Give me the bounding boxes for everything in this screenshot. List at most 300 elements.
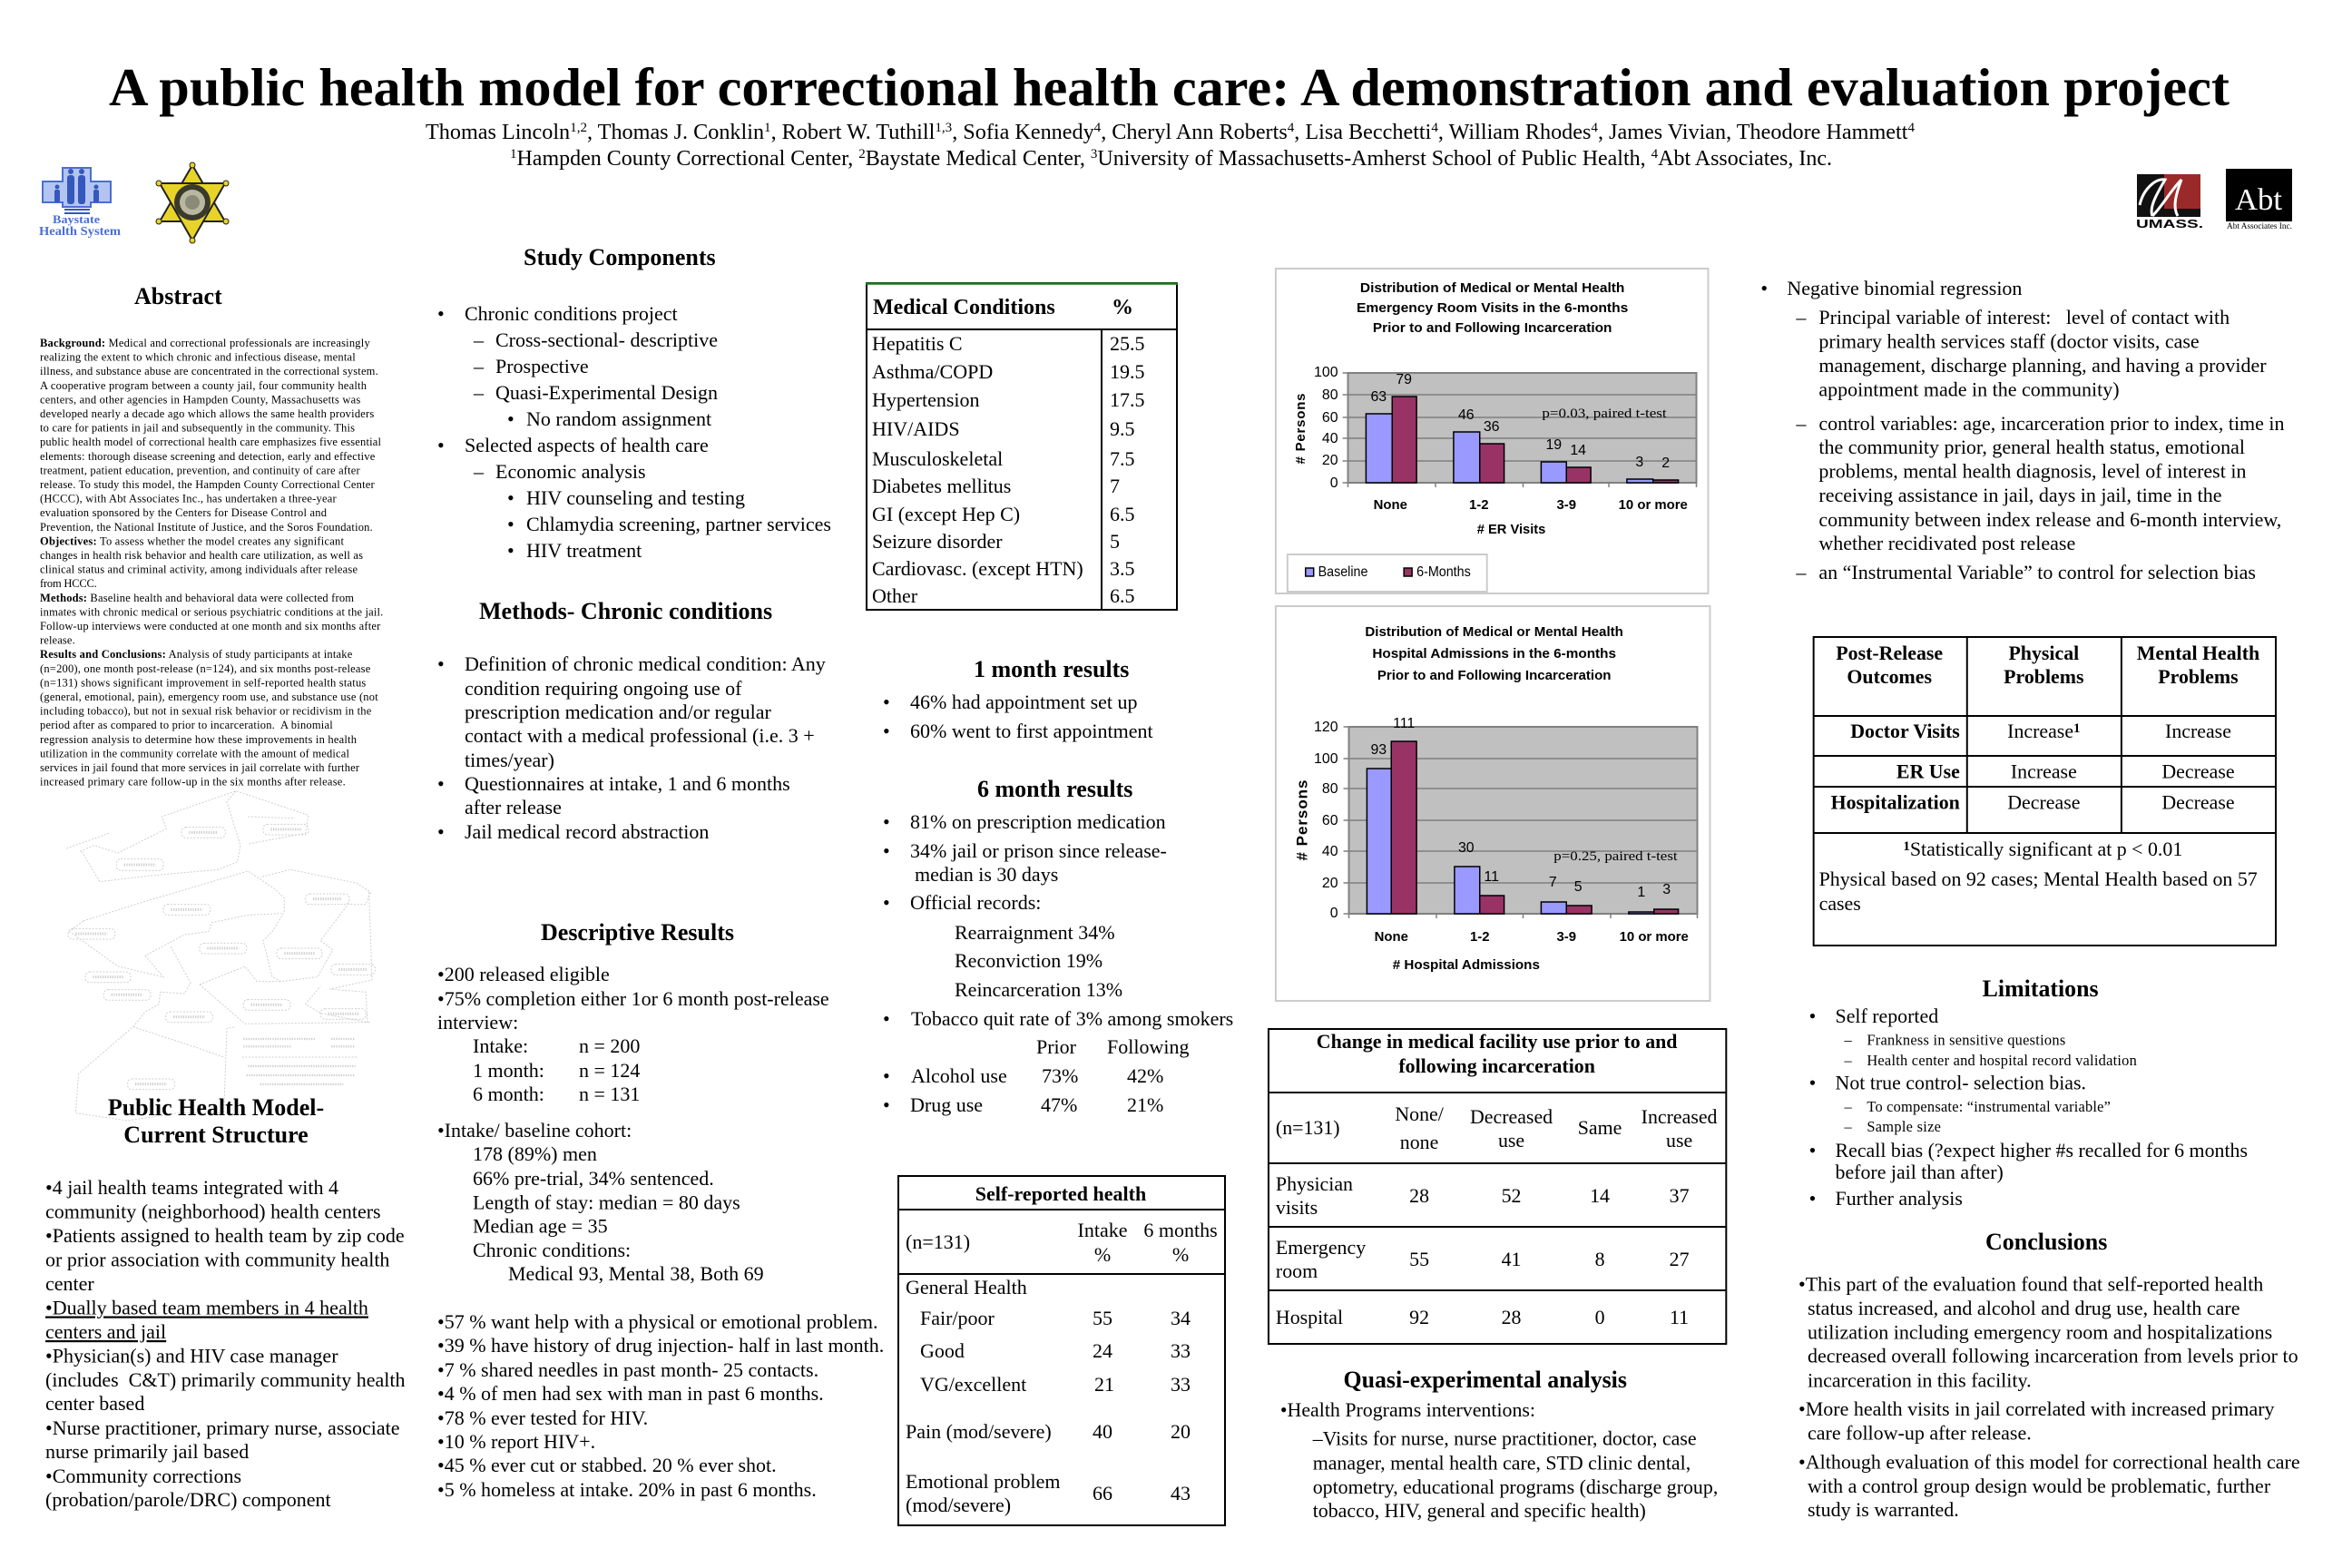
axis and value labels: 40: [1322, 431, 1338, 446]
text block: health programs interventions: –Visits for nurse, nurse practitioner, doctor, case: [1312, 1426, 1697, 1450]
axis and value labels: 20: [1322, 453, 1338, 468]
logo: Abt Associates: Abt Associates Inc.: [2227, 221, 2292, 230]
table: self-reported health: [898, 1176, 1225, 1525]
list: study components: [437, 302, 831, 562]
chart: hospital admissions: [1276, 606, 1710, 1001]
text block: negative binomial regression: –: [1795, 561, 1807, 583]
table: medical conditions: Seizure disorder: [872, 530, 1003, 553]
panel: abstract: [40, 283, 383, 789]
list: limitations: –: [1843, 1118, 1852, 1135]
text block: baseline cohort: 66% pre-trial, 34% sentenced.: [473, 1167, 714, 1190]
text block: risk behaviors: •45 % ever cut or stabbed. 20 % ever shot.: [437, 1454, 777, 1476]
list: limitations: Recall bias (?expect higher #s recalled for 6 months: [1836, 1139, 2248, 1161]
authors: 4: [1094, 121, 1102, 135]
list: methods: •: [437, 772, 445, 795]
axis and value labels: 14: [1570, 443, 1586, 458]
text block: enrollment: Intake:: [473, 1034, 528, 1057]
table: change in medical facility use: none: [1400, 1131, 1438, 1153]
text block: abstract body: evaluation sponsored by the Centers for Disease Control and: [40, 506, 328, 519]
text block: baseline cohort: Median age = 35: [473, 1214, 608, 1238]
table: post-release outcomes: Problems: [2004, 665, 2084, 688]
category and axis titles: None: [1374, 497, 1407, 513]
legend: 6-Months: [1416, 564, 1471, 580]
category and axis titles: 1-2: [1469, 497, 1489, 513]
table: medical conditions: 6.5: [1110, 584, 1134, 607]
affiliations: University of Massachusetts-Amherst School of Public Health,: [1097, 147, 1651, 171]
logo: Baystate Health System: Health System: [39, 225, 121, 239]
list: study components: –: [473, 355, 485, 377]
table: self-reported health: (n=131): [906, 1230, 970, 1253]
table: self-reported health: 6 months: [1143, 1219, 1218, 1241]
table: post-release outcomes: Physical: [2008, 642, 2079, 664]
table: self-reported health: %: [1172, 1243, 1189, 1266]
table: post-release outcomes: Outcomes: [1847, 665, 1932, 688]
table: self-reported health: 40: [1093, 1420, 1112, 1443]
heading: methods: Methods- Chronic conditions: [479, 598, 772, 624]
heading: abstract: Abstract: [134, 283, 222, 309]
text block: negative binomial regression: control variables: age, incarceration prior to index, time in: [1818, 412, 2285, 435]
text block: baseline cohort: Length of stay: median = 80 days: [473, 1191, 740, 1214]
text block: enrollment: interview:: [437, 1011, 518, 1034]
title: A public health model for correctional health care: A demonstration and evaluation project: [109, 57, 2230, 117]
text block: negative binomial regression: community between index release and 6-month interview,: [1818, 508, 2281, 531]
table: change in medical facility use: Hospital: [1276, 1306, 1343, 1328]
category and axis titles: # Hospital Admissions: [1393, 957, 1540, 973]
list: methods: prescription medication and/or regular: [465, 701, 771, 723]
text block: risk behaviors: •78 % ever tested for HIV.: [437, 1406, 648, 1429]
list: limitations: •: [1809, 1004, 1816, 1027]
text block: model description: •Patients assigned to health team by zip code: [45, 1224, 405, 1247]
text block: risk behaviors: •39 % have history of drug injection- half in last month.: [437, 1334, 884, 1357]
axis and value labels: 80: [1322, 781, 1338, 797]
text block: abstract body: including tobacco), but not in sexual risk behavior or recidivism in the: [40, 705, 372, 718]
axis and value labels: 20: [1322, 876, 1338, 891]
authors: , Cheryl Ann Roberts: [1101, 121, 1288, 144]
panel: limitations: [1809, 975, 2248, 1210]
text block: abstract body: (general, emotional, pain), emergency room use, and substance use (not: [40, 691, 378, 703]
logo: sheriff star: [156, 162, 229, 243]
text block: conclusions: decreased overall following incarceration from levels prior to: [1808, 1345, 2298, 1367]
p-value annotation: p=0.25, paired t-test: [1553, 849, 1679, 864]
affiliations: Hampden County Correctional Center,: [516, 147, 858, 171]
table: post-release outcomes: [1814, 637, 2276, 946]
table: post-release outcomes: Increase: [2011, 760, 2077, 783]
axis and value labels: 5: [1574, 879, 1583, 895]
table: self-reported health: VG/excellent: [920, 1373, 1026, 1396]
authors: 4: [1907, 121, 1916, 135]
table: change in medical facility use: Same: [1578, 1116, 1622, 1139]
text block: conclusions: •More health visits in jail correlated with increased primary: [1798, 1397, 2275, 1420]
list: 6 month results: Reincarceration 13%: [955, 978, 1122, 1001]
text block: abstract body: Background: Medical and correctional professionals are increasingly: [40, 337, 370, 349]
table: change in medical facility use: 55: [1409, 1248, 1429, 1270]
chart title: Hospital Admissions in the 6-months: [1372, 646, 1616, 662]
table: self-reported health: Pain (mod/severe): [906, 1420, 1052, 1443]
list: 6 month results: •: [883, 839, 890, 862]
logo: Abt Associates: Abt: [2235, 183, 2283, 217]
table: self-reported health: Good: [920, 1339, 965, 1362]
text block: abstract body: Follow-up interviews were conducted at one month and six months after: [40, 620, 381, 632]
table: change in medical facility use: 28: [1409, 1184, 1429, 1207]
panel: 6 month results: [883, 776, 1233, 1116]
text block: abstract body: elements: thorough disease screening and detection, early and effective: [40, 450, 376, 463]
affiliations: Baystate Medical Center,: [866, 147, 1091, 171]
list: 6 month results: median is 30 days: [915, 863, 1058, 886]
chart title: Prior to and Following Incarceration: [1373, 320, 1612, 336]
text block: model description: center based: [45, 1392, 144, 1415]
panel: 1 month results: [883, 656, 1153, 742]
heading: descriptive results: Descriptive Results: [541, 919, 734, 946]
table: medical conditions: 9.5: [1110, 417, 1134, 440]
text block: abstract body: services in jail found that more services in jail correlate with further: [40, 761, 360, 774]
table: medical conditions: 25.5: [1110, 332, 1145, 355]
list: study components: HIV counseling and testing: [526, 486, 745, 509]
axis and value labels: 79: [1396, 372, 1412, 387]
list: 6 month results: •: [883, 1007, 890, 1030]
text block: health programs interventions: optometry, educational programs (discharge group,: [1313, 1475, 1718, 1498]
text block: abstract body: changes in health risk behavior and health care utilization, as well as: [40, 549, 363, 562]
table: change in medical facility use: use: [1666, 1129, 1692, 1152]
text block: negative binomial regression: Principal variable of interest: level of contact with: [1818, 306, 2230, 328]
list: 6 month results: 42%: [1127, 1064, 1163, 1087]
category and axis titles: [1293, 394, 1688, 537]
category and axis titles: 10 or more: [1620, 929, 1689, 945]
chart title: Distribution of Medical or Mental Health: [1360, 280, 1624, 296]
text block: abstract body: [40, 337, 383, 789]
table: self-reported health: General Health: [906, 1276, 1027, 1298]
list: methods: Questionnaires at intake, 1 and 6 months: [465, 772, 790, 795]
text block: conclusions: study is warranted.: [1808, 1498, 1959, 1521]
legend: [1288, 554, 1487, 592]
list: 1 month results: 60% went to first appointment: [910, 720, 1153, 742]
list: methods: Definition of chronic medical condition: Any: [465, 652, 826, 675]
text block: negative binomial regression: problems, mental health diagnosis, level of interest in: [1818, 460, 2246, 483]
panel: study components: [437, 244, 831, 562]
table: self-reported health: 33: [1171, 1373, 1191, 1396]
table: change in medical facility use: following incarceration: [1398, 1054, 1595, 1077]
text block: conclusions: with a control group design would be problematic, further: [1808, 1475, 2271, 1497]
authors: , William Rhodes: [1438, 121, 1591, 144]
list: study components: Economic analysis: [495, 460, 646, 483]
list: study components: •: [507, 539, 514, 562]
table: change in medical facility use: 28: [1502, 1306, 1522, 1328]
table: self-reported health: 21: [1094, 1373, 1114, 1396]
table: medical conditions: Other: [872, 584, 918, 607]
list: 6 month results: [883, 810, 1233, 1116]
text block: baseline cohort: Medical 93, Mental 38, Both 69: [508, 1262, 764, 1285]
logo: Baystate Health System: [39, 168, 121, 239]
list: 6 month results: Alcohol use: [911, 1064, 1007, 1087]
list: limitations: before jail than after): [1836, 1161, 2004, 1183]
table: self-reported health: 20: [1171, 1420, 1191, 1443]
table: medical conditions: HIV/AIDS: [872, 417, 960, 440]
table: post-release outcomes: Decrease: [2007, 790, 2080, 814]
text block: abstract body: (n=200), one month post-release (n=124), and six months post-release: [40, 662, 371, 675]
category and axis titles: # ER Visits: [1477, 522, 1545, 537]
panel: descriptive results: [437, 919, 884, 1501]
table: medical conditions: Cardiovasc. (except HTN): [872, 557, 1083, 580]
text block: enrollment: [437, 963, 829, 1105]
table: change in medical facility use: Change in medical facility use prior to and: [1317, 1030, 1677, 1053]
axis and value labels: 3: [1662, 882, 1671, 897]
bars: baseline: [1366, 414, 1653, 483]
table: self-reported health: 24: [1093, 1339, 1112, 1362]
text block: health programs interventions: manager, mental health care, STD clinic dental,: [1313, 1451, 1690, 1475]
list: study components: No random assignment: [526, 407, 711, 430]
table: change in medical facility use: 37: [1670, 1184, 1690, 1207]
text block: negative binomial regression: an “Instrumental Variable” to control for selection bias: [1818, 561, 2256, 583]
text block: abstract body: (HCCC), with Abt Associates Inc., has undertaken a three-year: [40, 493, 338, 505]
affiliations: 4: [1651, 147, 1659, 162]
axis and value labels: 100: [1314, 751, 1338, 767]
category and axis titles: [1294, 780, 1689, 973]
list: limitations: Sample size: [1867, 1118, 1941, 1135]
table: self-reported health: (mod/severe): [906, 1494, 1011, 1516]
list: limitations: •: [1809, 1071, 1816, 1094]
list: study components: Chlamydia screening, partner services: [526, 513, 831, 535]
text block: conclusions: utilization including emergency room and hospitalizations: [1808, 1321, 2272, 1343]
axis and value labels: 19: [1545, 437, 1562, 453]
axis and value labels: 36: [1484, 419, 1500, 435]
heading: quasi-experimental analysis: Quasi-experimental analysis: [1344, 1367, 1627, 1393]
text block: abstract body: Results and Conclusions: Analysis of study participants at intake: [40, 648, 353, 661]
text block: risk behaviors: •7 % shared needles in past month- 25 contacts.: [437, 1358, 818, 1381]
text block: baseline cohort: Chronic conditions:: [473, 1239, 631, 1261]
text block: conclusions: incarceration in this facility.: [1808, 1368, 2032, 1392]
text block: abstract body: period after as compared to prior to incarceration. A binomial: [40, 719, 333, 731]
text block: model description: •Physician(s) and HIV case manager: [45, 1345, 338, 1367]
list: study components: Selected aspects of health care: [465, 434, 709, 456]
p-value annotation: p=0.03, paired t-test: [1542, 407, 1668, 421]
list: study components: –: [473, 381, 485, 404]
text block: risk behaviors: •5 % homeless at intake. 20% in past 6 months.: [437, 1478, 817, 1501]
list: limitations: •: [1809, 1187, 1816, 1210]
authors: 1: [764, 121, 771, 135]
table: medical conditions: GI (except Hep C): [872, 503, 1020, 525]
heading: public health model current structure: Public Health Model-: [108, 1094, 324, 1121]
text block: abstract body: release.: [40, 634, 75, 647]
text block: abstract body: realizing the extent to which chronic and infectious disease, mental: [40, 351, 356, 364]
table: post-release outcomes: Decrease: [2161, 790, 2235, 814]
table: medical conditions: Medical Conditions: [873, 296, 1055, 319]
table: self-reported health: 55: [1093, 1307, 1112, 1329]
list: 6 month results: 73%: [1042, 1064, 1078, 1087]
text block: risk behaviors: •10 % report HIV+.: [437, 1430, 595, 1453]
text block: negative binomial regression: the community prior, general health status, emotional: [1818, 436, 2245, 458]
text block: negative binomial regression: primary health services staff (doctor visits, case: [1818, 330, 2200, 352]
axis and value labels: 46: [1458, 407, 1475, 423]
axis and value labels: 80: [1322, 387, 1338, 403]
axis and value labels: 111: [1393, 716, 1415, 731]
table: medical conditions: Musculoskeletal: [872, 447, 1003, 470]
axis and value labels: 93: [1370, 742, 1387, 758]
list: study components: –: [473, 460, 485, 483]
list: 6 month results: 47%: [1041, 1093, 1077, 1116]
list: methods: times/year): [465, 749, 554, 771]
panel: methods chronic conditions: [437, 598, 826, 843]
table: self-reported health: 33: [1171, 1339, 1191, 1362]
list: 6 month results: Tobacco quit rate of 3% among smokers: [911, 1007, 1233, 1030]
list: 6 month results: •: [883, 810, 890, 833]
table: self-reported health: Emotional problem: [906, 1470, 1060, 1493]
authors: , James Vivian, Theodore Hammett: [1598, 121, 1908, 144]
panel: public health model: [45, 1094, 406, 1511]
axis and value labels: 30: [1458, 840, 1475, 856]
table: post-release outcomes: Statistically significant at p < 0.01: [1910, 838, 2182, 860]
axis and value labels: 11: [1484, 869, 1499, 885]
list: 6 month results: Rearraignment 34%: [955, 921, 1115, 944]
text block: model description: nurse primarily jail based: [45, 1440, 249, 1463]
list: study components: Quasi-Experimental Design: [495, 381, 718, 404]
table: change in medical facility use: 8: [1595, 1248, 1605, 1270]
axis and value labels: 100: [1314, 365, 1338, 380]
text block: negative binomial regression: receiving assistance in jail, days in jail, time in the: [1818, 484, 2222, 506]
table: self-reported health: 66: [1093, 1482, 1112, 1504]
axis and value labels: 120: [1314, 720, 1338, 735]
list: study components: Cross-sectional- descriptive: [495, 328, 718, 351]
table: medical conditions: Asthma/COPD: [872, 360, 993, 383]
chart title: [1365, 624, 1623, 683]
table: change in medical facility use: Increased: [1642, 1105, 1718, 1128]
table: change in medical facility use: (n=131): [1276, 1116, 1340, 1139]
axis and value labels: 63: [1370, 389, 1387, 405]
text block: abstract body: increased primary care follow-up in the six months after release.: [40, 776, 346, 789]
text block: health programs interventions: [1280, 1398, 1718, 1522]
table: medical conditions: 17.5: [1110, 388, 1145, 411]
list: 6 month results: •: [883, 1064, 890, 1087]
list: 6 month results: Reconviction 19%: [955, 949, 1102, 972]
table: self-reported health: Self-reported health: [975, 1182, 1146, 1205]
category and axis titles: 3-9: [1556, 497, 1576, 513]
text block: negative binomial regression: –: [1795, 412, 1807, 435]
table: post-release outcomes: Hospitalization: [1831, 790, 1960, 814]
list: 6 month results: Official records:: [910, 891, 1041, 914]
panel: quasi-experimental analysis: [1280, 1367, 1718, 1522]
table: self-reported health: Fair/poor: [920, 1307, 995, 1329]
table: self-reported health: 43: [1171, 1482, 1191, 1504]
list: 6 month results: Drug use: [910, 1093, 983, 1116]
list: 6 month results: Following: [1107, 1035, 1189, 1058]
list: methods: [437, 652, 826, 843]
text block: abstract body: treatment, patient education, prevention, and continuity of care after: [40, 464, 361, 476]
logo: Baystate Health System: Baystate: [53, 212, 100, 226]
table: medical conditions: [866, 283, 1178, 610]
text block: model description: •4 jail health teams integrated with 4: [45, 1176, 338, 1199]
text block: negative binomial regression: –: [1795, 306, 1807, 328]
affiliations: 2: [858, 147, 866, 162]
text block: conclusions: status increased, and alcohol and drug use, health care: [1808, 1297, 2239, 1319]
list: study components: •: [507, 486, 514, 509]
table: change in medical facility use: 41: [1502, 1248, 1521, 1270]
text block: conclusions: [1798, 1272, 2300, 1521]
table: change in medical facility use: Decreased: [1470, 1105, 1553, 1128]
panel: conclusions: [1798, 1229, 2300, 1521]
table: change in medical facility use: 14: [1590, 1184, 1610, 1207]
text block: model description: community (neighborhood) health centers: [45, 1200, 381, 1223]
text block: risk behaviors: •57 % want help with a physical or emotional problem.: [437, 1310, 877, 1333]
bars: baseline: [1367, 769, 1654, 914]
text block: enrollment: n = 124: [579, 1059, 640, 1082]
text block: baseline cohort: •Intake/ baseline cohort:: [437, 1119, 632, 1142]
text block: health programs interventions: •Health Programs interventions:: [1280, 1398, 1535, 1421]
heading: study components: Study Components: [524, 244, 716, 270]
axis and value labels: 40: [1322, 844, 1338, 859]
text block: conclusions: •Although evaluation of this model for correctional health care: [1798, 1450, 2300, 1474]
category and axis titles: 1-2: [1470, 929, 1490, 945]
list: methods: after release: [465, 796, 562, 818]
heading: limitations: Limitations: [1983, 975, 2099, 1002]
text block: model description: center: [45, 1272, 94, 1295]
category and axis titles: # Persons: [1293, 394, 1308, 465]
list: limitations: –: [1843, 1031, 1852, 1049]
list: 1 month results: 46% had appointment set up: [910, 691, 1138, 713]
affiliations: 1: [510, 147, 516, 162]
table: medical conditions: %: [1112, 296, 1133, 319]
axis and value labels: 2: [1661, 456, 1670, 471]
list: 6 month results: •: [883, 891, 890, 914]
text block: baseline cohort: 178 (89%) men: [473, 1142, 597, 1165]
text block: abstract body: Prevention, the National Institute of Justice, and the Soros Foundation.: [40, 521, 373, 534]
table: post-release outcomes: Decrease: [2161, 760, 2235, 783]
heading: public health model current structure: Current Structure: [123, 1122, 309, 1148]
axis and value labels: 1: [1637, 885, 1645, 900]
authors: 4: [1431, 121, 1438, 135]
affiliations: Abt Associates, Inc.: [1658, 147, 1832, 171]
table: medical conditions: 3.5: [1110, 557, 1134, 580]
text block: model description: or prior association with community health: [45, 1249, 389, 1271]
authors: , Sofia Kennedy: [952, 121, 1094, 144]
text block: abstract body: public health model of correctional health care emphasizes five essential: [40, 436, 382, 448]
table: self-reported health: Intake: [1078, 1219, 1127, 1241]
text block: abstract body: illness, and substance abuse are concentrated in the correctional system.: [40, 365, 378, 377]
text block: enrollment: 1 month:: [473, 1059, 544, 1082]
list: study components: •: [437, 302, 445, 325]
text block: abstract body: Methods: Baseline health and behavioral data were collected from: [40, 592, 354, 604]
category and axis titles: 3-9: [1556, 929, 1576, 945]
axis and value labels: 60: [1322, 813, 1338, 828]
text block: model description: [45, 1176, 406, 1511]
text block: model description: (includes C&T) primarily community health: [45, 1368, 406, 1391]
table: change in medical facility use: [1269, 1029, 1726, 1344]
text block: conclusions: •This part of the evaluation found that self-reported health: [1798, 1272, 2263, 1296]
table: post-release outcomes: cases: [1819, 892, 1861, 915]
table: change in medical facility use: Physician: [1276, 1172, 1353, 1195]
table: post-release outcomes: Post-Release: [1836, 642, 1943, 664]
text block: abstract body: release. To study this model, the Hampden County Correctional Center: [40, 478, 376, 491]
heading: 6 month results: 6 month results: [977, 776, 1132, 802]
text block: model description: centers and jail: [45, 1320, 166, 1343]
list: methods: •: [437, 820, 445, 843]
heading: public health model current structure: [108, 1094, 324, 1148]
list: study components: •: [437, 434, 445, 456]
table: medical conditions: 5: [1110, 530, 1120, 553]
chart title: [1357, 280, 1628, 336]
text block: abstract body: utilization in the community correlate with the amount of medical: [40, 747, 350, 760]
legend: Baseline: [1318, 564, 1368, 580]
table: change in medical facility use: use: [1498, 1129, 1524, 1152]
text block: health programs interventions: tobacco, HIV, general and specific health): [1313, 1499, 1646, 1522]
list: study components: Chronic conditions project: [465, 302, 678, 325]
category and axis titles: # Persons: [1294, 780, 1311, 860]
text block: negative binomial regression: •: [1760, 277, 1768, 299]
table: post-release outcomes: Increase: [2007, 720, 2073, 742]
text block: negative binomial regression: whether recidivated post release: [1818, 532, 2075, 554]
text block: abstract body: to care for patients in jail and subsequently in the community. This: [40, 422, 355, 435]
affiliations: 3: [1091, 147, 1097, 162]
table: self-reported health: %: [1094, 1243, 1111, 1266]
table: post-release outcomes: 1: [2073, 721, 2081, 736]
logo: Abt Associates: [2226, 169, 2292, 230]
